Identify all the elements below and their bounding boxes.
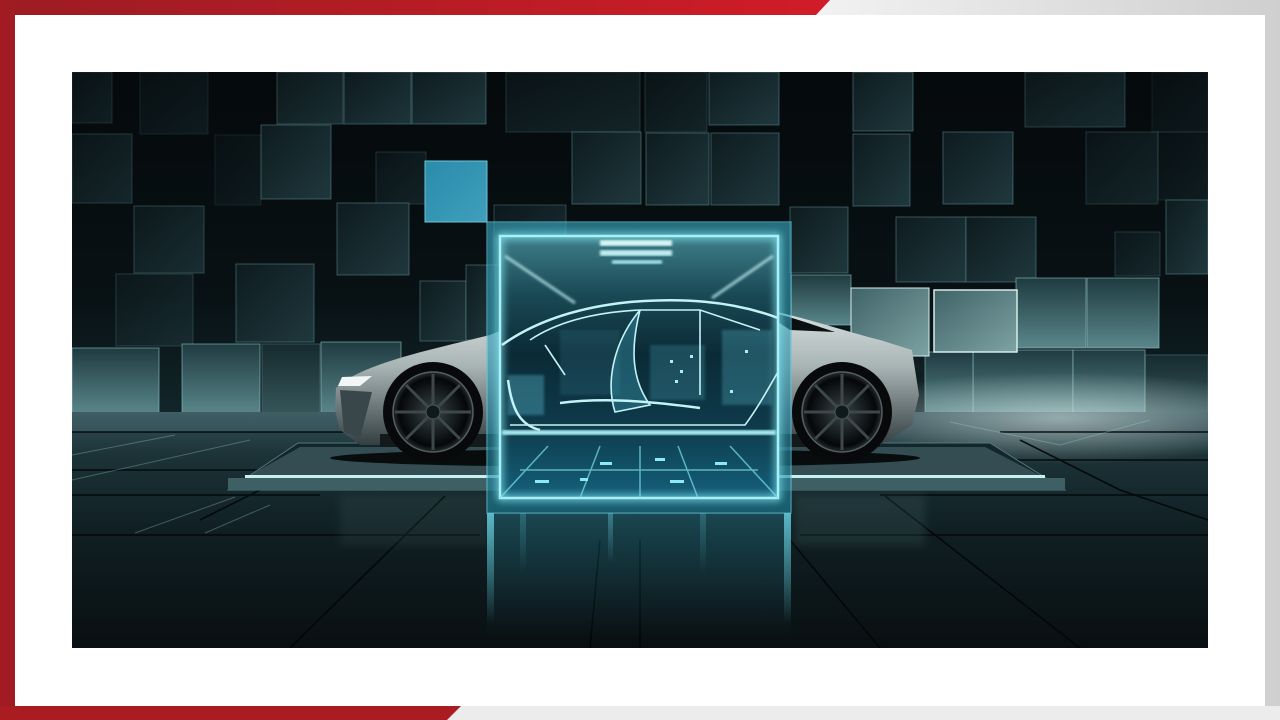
illustration panel: [72, 72, 1280, 648]
floor: [72, 372, 1280, 648]
hologram window frame line: [500, 236, 778, 498]
hologram floor band: [502, 430, 776, 435]
hologram inner window: [500, 236, 778, 498]
wall: lighter lower cubes: [72, 275, 1208, 414]
wall: bright cubes right of the car: [851, 288, 1017, 356]
hologram floor grid: [500, 446, 778, 498]
floor tile lines: [72, 432, 1208, 648]
car: [330, 302, 920, 467]
glowing platform under the car: [228, 443, 1065, 490]
hologram window glow border: [500, 236, 778, 498]
frame: red top band: [0, 0, 830, 15]
hologram scanner box: [487, 222, 791, 513]
wall: dark upper cubes: [72, 72, 1208, 346]
frame: grey top and right band: [814, 0, 1280, 720]
front wheel: [383, 362, 483, 462]
car body: [335, 302, 919, 445]
hologram light trails on floor: [487, 513, 791, 622]
lab ceiling lights: [505, 240, 773, 303]
rear wheel: [792, 362, 892, 462]
background wall: [72, 72, 1208, 417]
frame: grey bottom band: [445, 706, 1280, 720]
x-ray car outline: [502, 300, 778, 430]
floor reflections: [340, 495, 925, 545]
frame: red bottom band: [0, 706, 461, 720]
accent: blue floating cube: [425, 161, 487, 222]
x-ray machinery detail: [508, 330, 772, 415]
frame: red left band: [0, 0, 15, 720]
x-ray sparkle points: [670, 350, 748, 393]
hologram outer frame: [487, 222, 791, 513]
